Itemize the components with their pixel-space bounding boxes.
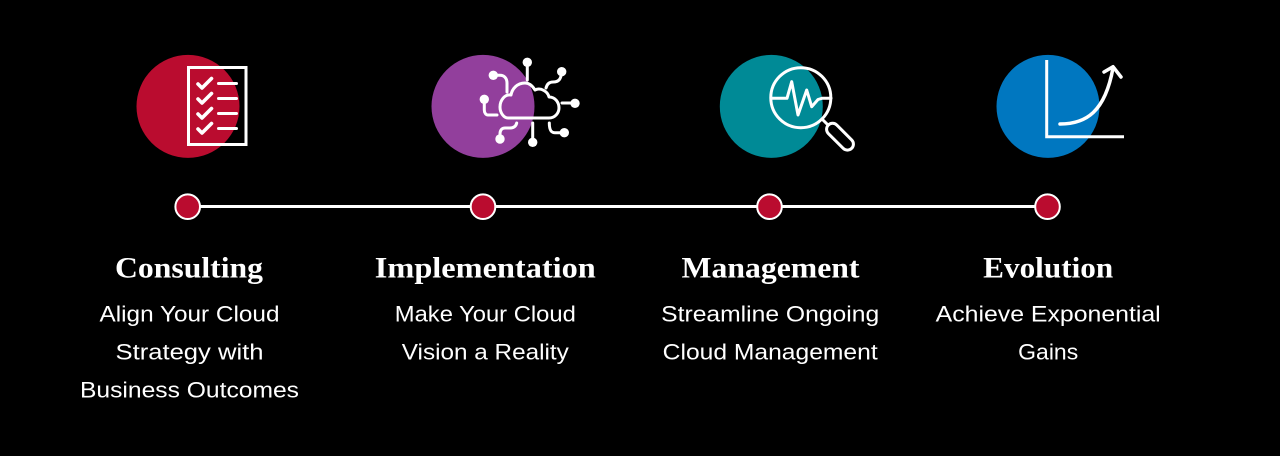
text: Implementation description: Make Your Cloud	[395, 302, 576, 327]
text: Evolution description	[936, 302, 1161, 365]
icon: consulting checklist	[136, 55, 246, 158]
heading: Implementation: Implementation	[375, 251, 596, 284]
text: Evolution description: Gains	[1018, 340, 1078, 365]
text: Consulting description: Business Outcomes	[80, 378, 299, 403]
heading: Evolution: Evolution	[983, 251, 1114, 284]
timeline	[175, 194, 1060, 219]
heading: Management: Management	[682, 251, 860, 284]
timeline node 1	[175, 194, 200, 219]
text: Consulting description: Align Your Cloud	[100, 302, 280, 327]
icon: evolution growth chart	[996, 55, 1124, 158]
text: Implementation description	[395, 302, 576, 365]
text: Consulting description	[80, 302, 299, 403]
text: Management description: Streamline Ongoing	[661, 302, 879, 327]
text: Management description	[661, 302, 879, 365]
heading: Consulting: Consulting	[115, 251, 263, 284]
icon: management magnifier with pulse	[720, 55, 856, 158]
icon: implementation cloud network	[432, 55, 580, 158]
timeline node 2	[471, 194, 495, 219]
text: Management description: Cloud Management	[663, 340, 878, 365]
text: Implementation description: Vision a Reality	[402, 340, 569, 365]
timeline node 3	[757, 194, 782, 219]
text: Evolution description: Achieve Exponential	[936, 302, 1161, 327]
text: Consulting description: Strategy with	[116, 340, 264, 365]
timeline node 4	[1035, 194, 1060, 219]
